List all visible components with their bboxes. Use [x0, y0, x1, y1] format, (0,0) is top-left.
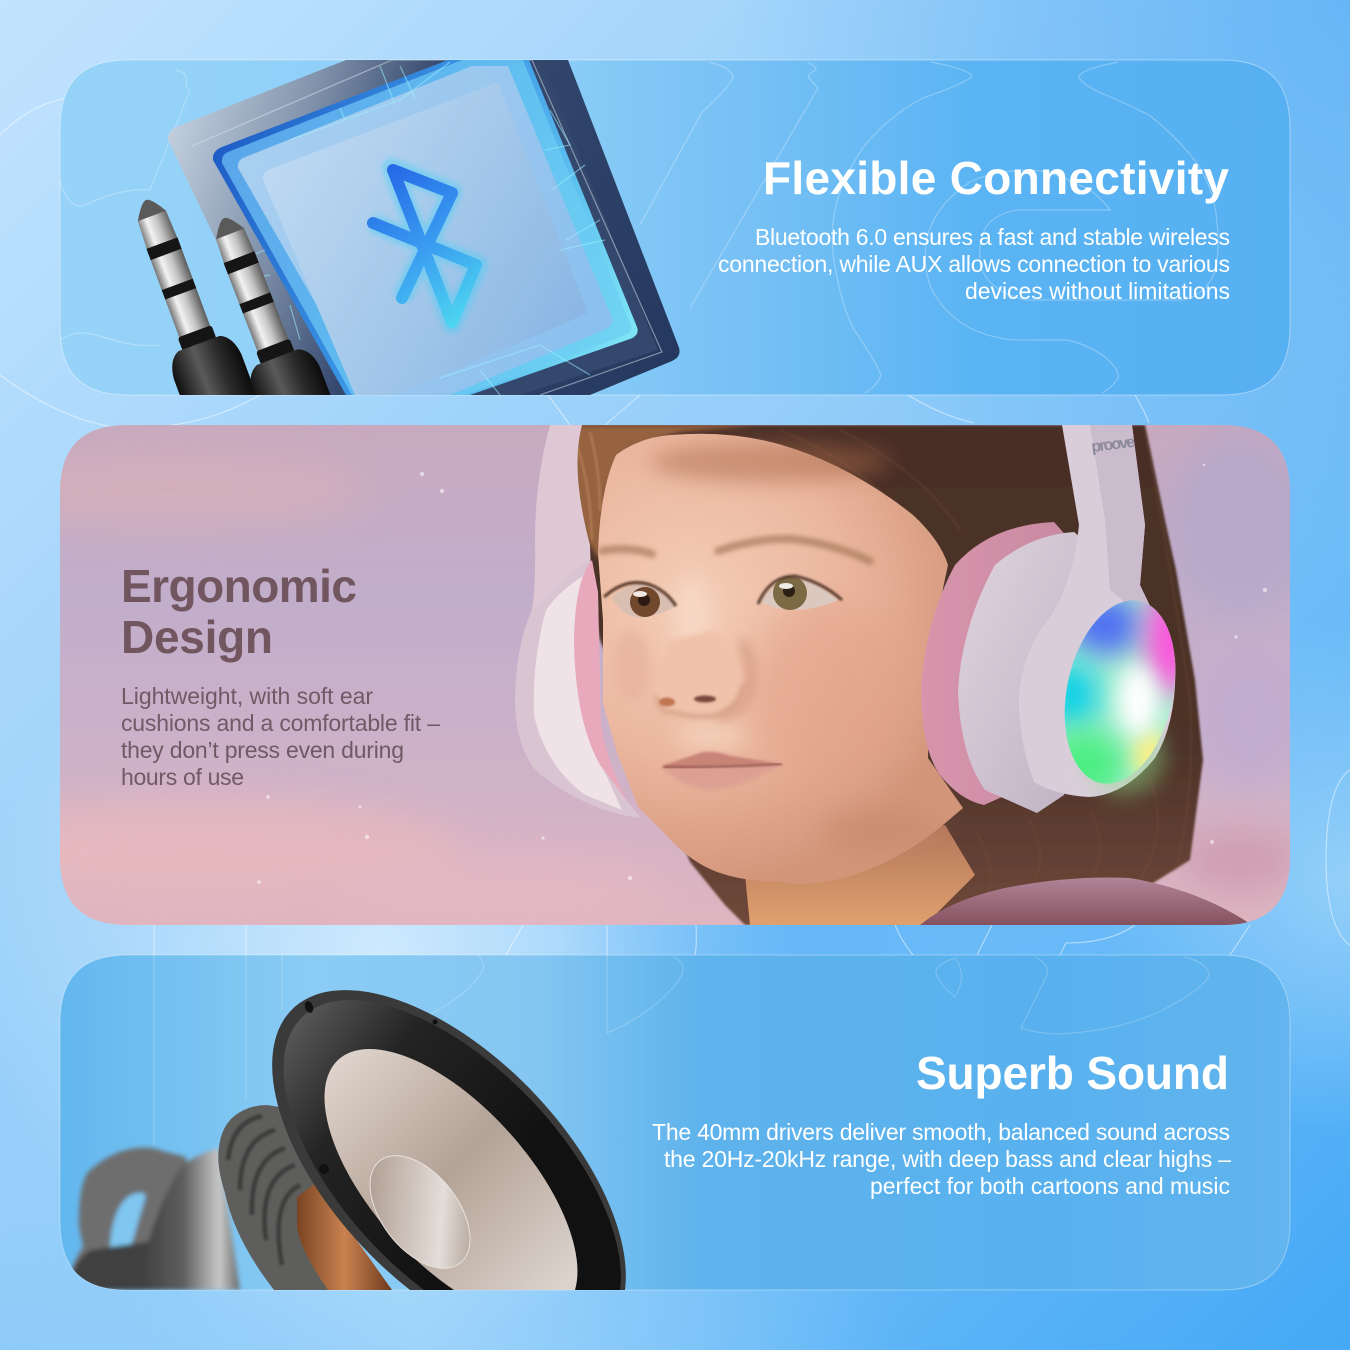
heading: superb sound: Superb Sound [916, 1047, 1229, 1099]
right ear cup body [958, 532, 1090, 813]
icon: bluetooth symbol [372, 168, 478, 323]
panel 1 outline decoration [60, 62, 1218, 393]
speaker copper coil [297, 1183, 392, 1290]
text block: sound description: The 40mm drivers deliver smooth, balanced sound across [652, 1119, 1230, 1145]
LED glow [1085, 715, 1165, 795]
chip: blue edge layer [213, 60, 638, 395]
panel 3 outline decoration [154, 955, 1209, 1145]
text block: connectivity description [718, 224, 1230, 304]
left cup white stripe [534, 575, 622, 810]
speaker frame [272, 990, 626, 1290]
chip: glass ring layer [222, 60, 631, 395]
left cushion [574, 560, 628, 802]
logo on headband: proove [1090, 434, 1136, 456]
text block: sound description [652, 1119, 1231, 1199]
left eye [604, 583, 676, 618]
chip: frosted top [263, 83, 586, 395]
LED rainbow panel [1045, 585, 1194, 801]
chip: glass layer [238, 66, 612, 395]
chip: inner plate line [192, 60, 662, 395]
text block: connectivity description: Bluetooth 6.0 ensures a fast and stable wireless [755, 224, 1230, 250]
sweater [920, 877, 1252, 925]
heading: ergonomic design [121, 560, 357, 663]
text block: ergonomic description: cushions and a comfortable fit – [121, 710, 440, 736]
text block: ergonomic description [121, 683, 440, 790]
right ear cushion [921, 522, 1070, 805]
panel 2 sky background [0, 425, 1310, 925]
text block: connectivity description: devices without limitations [965, 278, 1230, 304]
left headband [531, 425, 592, 615]
panel: superb sound [60, 955, 1290, 1290]
icon: audio jack 1 [138, 200, 254, 395]
headband shade [1090, 425, 1160, 630]
icon: audio jack 2 [216, 218, 330, 395]
left ear cup [515, 588, 641, 818]
speaker spider [218, 1105, 335, 1290]
hair strands [575, 430, 1191, 900]
panel 1 background [60, 60, 1290, 395]
girl with headphones [515, 425, 1252, 925]
speaker surround [284, 1000, 621, 1290]
face [598, 434, 963, 884]
hair [566, 425, 1203, 925]
face shading [614, 442, 940, 852]
speaker rear basket (blurred) [68, 1148, 240, 1290]
text block: ergonomic description: they don’t press even during [121, 737, 404, 763]
chip circuit glow lines [240, 62, 605, 395]
right eye [758, 576, 842, 610]
panel 3 background [60, 955, 1290, 1290]
neck [745, 825, 975, 925]
text block: sound description: the 20Hz-20kHz range, with deep bass and clear highs – [664, 1146, 1231, 1172]
nose [655, 630, 751, 717]
panel: ergonomic design [0, 425, 1310, 925]
text block: ergonomic description: hours of use [121, 764, 244, 790]
right headband and outer cup [1019, 425, 1175, 797]
chip: gray plate [168, 60, 658, 395]
panel: flexible connectivity [60, 60, 1290, 396]
hair highlight near forehead [578, 425, 750, 560]
mounting holes [303, 1000, 438, 1174]
chip: outer dark plate [520, 60, 680, 395]
heading: ergonomic design: Design [121, 611, 273, 663]
text block: sound description: perfect for both cartoons and music [870, 1173, 1230, 1199]
mouth [662, 752, 782, 790]
heading: ergonomic design: Ergonomic [121, 560, 357, 612]
text block: connectivity description: connection, while AUX allows connection to various [718, 251, 1230, 277]
speaker cone [324, 1049, 577, 1290]
speaker driver [68, 990, 626, 1290]
speaker dust cap [350, 1137, 490, 1287]
text block: ergonomic description: Lightweight, with soft ear [121, 683, 373, 709]
eyebrows [602, 539, 870, 561]
heading: flexible connectivity: Flexible Connectivity [763, 152, 1229, 204]
